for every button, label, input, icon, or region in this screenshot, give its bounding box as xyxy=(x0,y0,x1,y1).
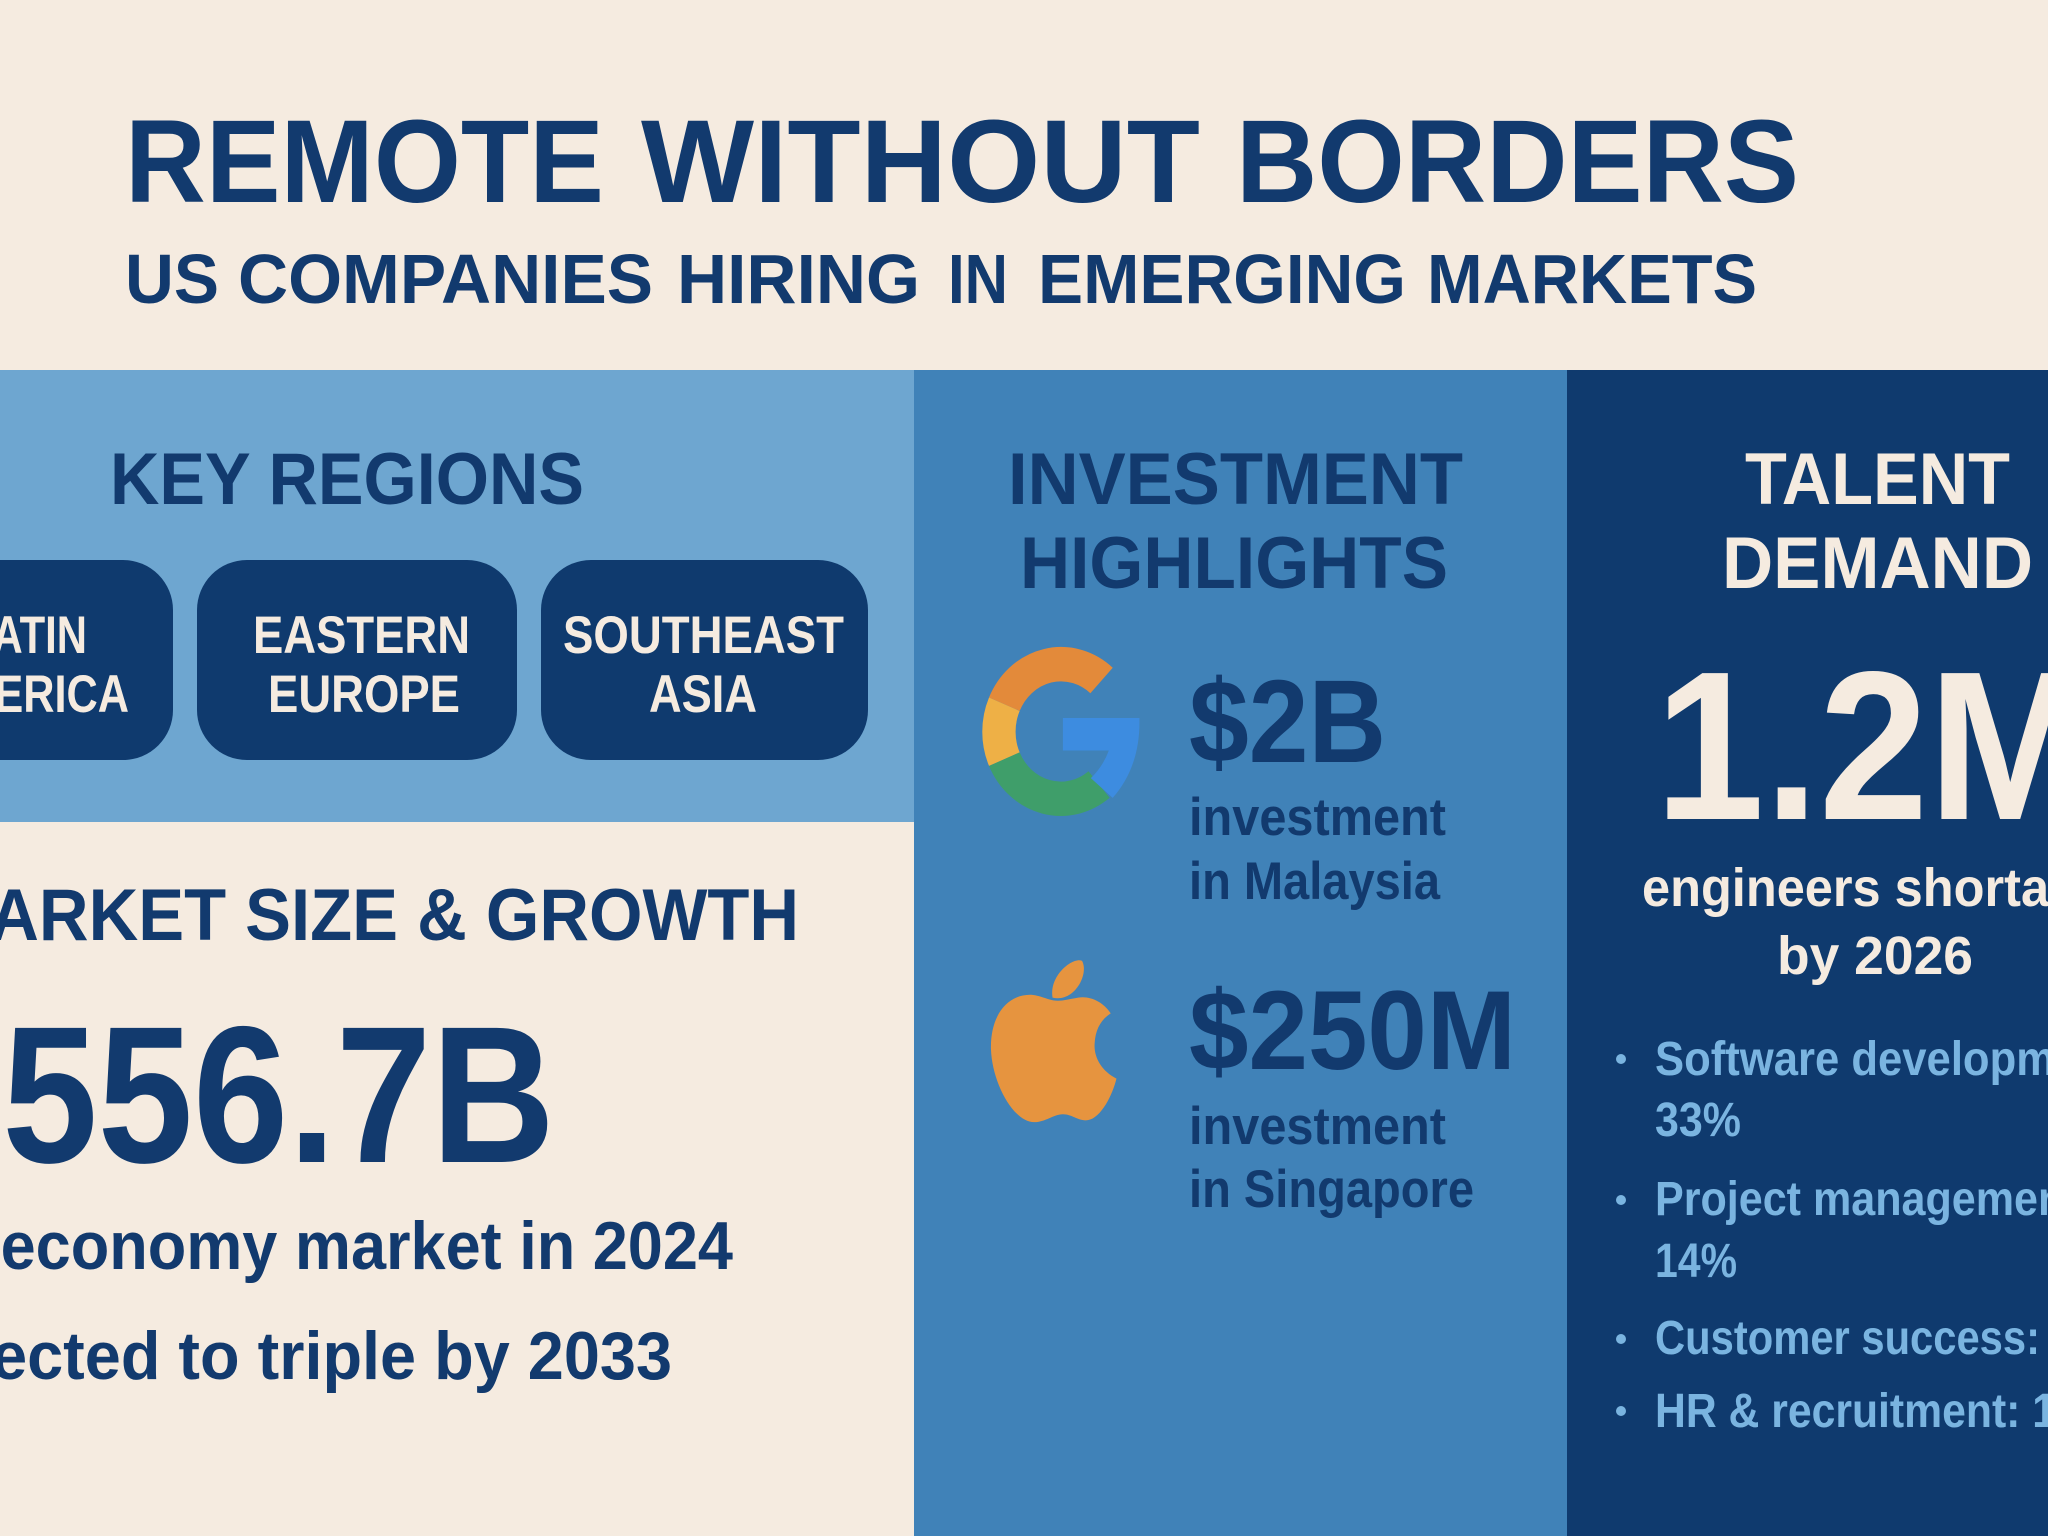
heading: investment highlights: INVESTMENT xyxy=(1008,439,1463,520)
role demand list: 33% xyxy=(1655,1094,1741,1147)
stat: Google investment xyxy=(1189,656,1446,911)
title: WITHOUT xyxy=(641,96,1200,228)
stat: Apple investment: investment xyxy=(1189,1097,1446,1156)
stat: Google investment: $2B xyxy=(1189,656,1386,788)
shortage caption xyxy=(1642,858,2048,986)
title: BORDERS xyxy=(1236,96,1799,228)
panel: talent demand xyxy=(1567,370,2048,1536)
region pill: Eastern Europe xyxy=(197,560,517,760)
subtitle: HIRING xyxy=(677,240,920,318)
panel: key regions xyxy=(0,370,914,822)
heading: key regions: KEY REGIONS xyxy=(110,439,584,520)
heading: investment highlights xyxy=(1008,439,1463,604)
subtitle: COMPANIES xyxy=(238,240,653,318)
region pill: Eastern Europe: EUROPE xyxy=(268,665,460,724)
region pill: Southeast Asia xyxy=(541,560,868,760)
heading: talent demand: TALENT xyxy=(1745,439,2010,520)
title xyxy=(125,96,1799,228)
heading: talent demand xyxy=(1722,439,2033,604)
heading: talent demand: DEMAND xyxy=(1722,523,2033,604)
heading: investment highlights: HIGHLIGHTS xyxy=(1020,523,1448,604)
subtitle: EMERGING xyxy=(1038,240,1406,318)
stat: Apple investment xyxy=(1189,968,1516,1219)
header: title and subtitle xyxy=(125,96,1799,318)
subtitle: US xyxy=(125,240,219,318)
panel: investment highlights xyxy=(914,370,1567,1536)
role demand list xyxy=(1616,1033,2048,1438)
subtitle xyxy=(125,240,1757,318)
icon: Google G xyxy=(999,664,1139,799)
stat: Apple investment: $250M xyxy=(1189,968,1516,1093)
role demand list: 14% xyxy=(1655,1235,1737,1288)
region pill: Southeast Asia: ASIA xyxy=(649,665,757,724)
subtitle: MARKETS xyxy=(1427,240,1757,318)
region pill: Latin America xyxy=(0,560,173,760)
icon: Apple logo xyxy=(991,960,1116,1122)
region pill: Eastern Europe: EASTERN xyxy=(253,606,470,665)
stat: Apple investment: in Singapore xyxy=(1189,1160,1474,1219)
title: REMOTE xyxy=(125,96,604,228)
region pill: Southeast Asia: SOUTHEAST xyxy=(563,606,844,665)
panel: market size and growth xyxy=(0,875,799,1394)
shortage caption: by 2026 xyxy=(1777,926,1973,986)
subtitle: IN xyxy=(948,240,1008,318)
stat: Google investment: in Malaysia xyxy=(1189,852,1440,911)
stat: Google investment: investment xyxy=(1189,788,1446,847)
